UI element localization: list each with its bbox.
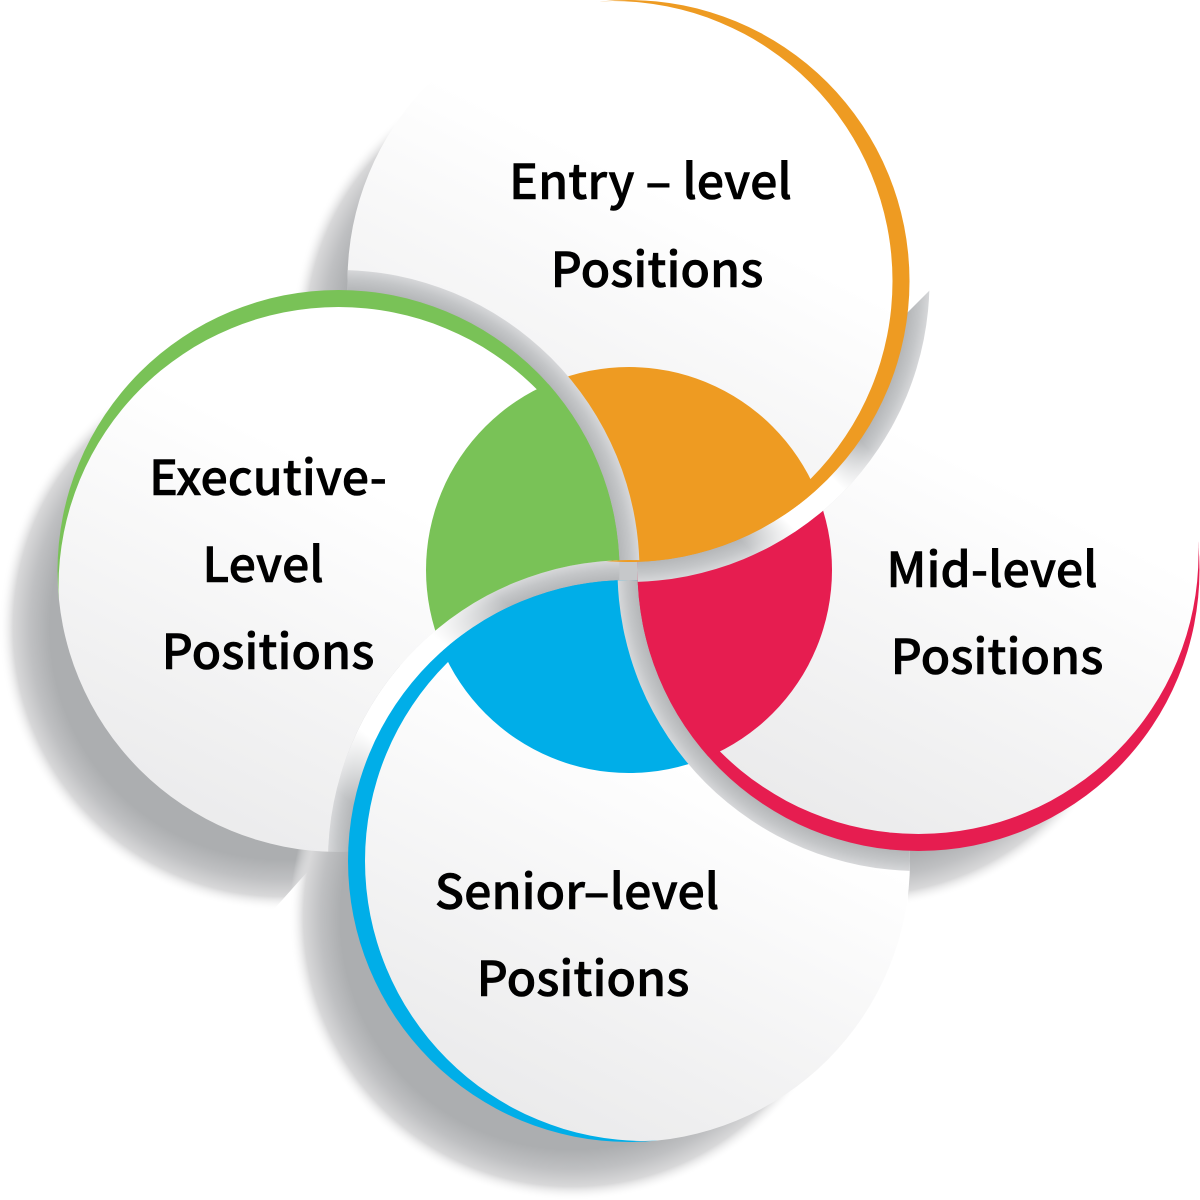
shadow: green circle [6, 418, 400, 904]
label: mid-level positions: Positions [891, 618, 1103, 688]
label: mid-level positions: Mid-level [886, 531, 1098, 601]
shadow: blue circle [289, 635, 855, 1200]
label: executive-level positions: Level [202, 526, 324, 596]
orange centre wedge [568, 367, 816, 562]
label: entry-level positions: Positions [551, 231, 763, 301]
red sheet [720, 500, 1140, 834]
panel: senior-level circle (blue) [328, 561, 910, 1142]
panel: executive-level circle (green) [58, 270, 640, 852]
red rim shadow on blue [618, 580, 910, 871]
green rim shadow on orange [348, 270, 640, 561]
label: executive-level positions [149, 439, 387, 683]
panel: entry-level circle (orange) [348, 0, 930, 582]
shadow: orange circle [291, 57, 853, 619]
label: executive-level positions: Executive- [149, 439, 387, 509]
blue sheet [365, 756, 910, 1142]
label: senior-level positions [435, 853, 719, 1010]
blue rim shadow on green [328, 561, 620, 852]
label: entry-level positions [509, 143, 792, 301]
label: entry-level positions: Entry – level [509, 143, 792, 213]
orange sheet [348, 63, 888, 478]
blue centre wedge [442, 580, 688, 773]
blue ring [348, 580, 658, 1142]
label: mid-level positions [886, 531, 1103, 688]
label: executive-level positions: Positions [162, 613, 374, 683]
orange ring [600, 0, 910, 562]
red ring [638, 542, 1200, 851]
shadow: red circle [908, 806, 1070, 898]
label: senior-level positions: Senior–level [435, 853, 719, 923]
centre junction gray [605, 547, 653, 595]
red centre wedge [638, 510, 832, 756]
orange rim shadow on red [638, 290, 930, 582]
panel: mid-level circle (red) [618, 500, 1200, 871]
green centre wedge [426, 384, 620, 631]
label: senior-level positions: Positions [477, 940, 689, 1010]
green sheet [58, 306, 620, 868]
green ring [58, 290, 620, 599]
